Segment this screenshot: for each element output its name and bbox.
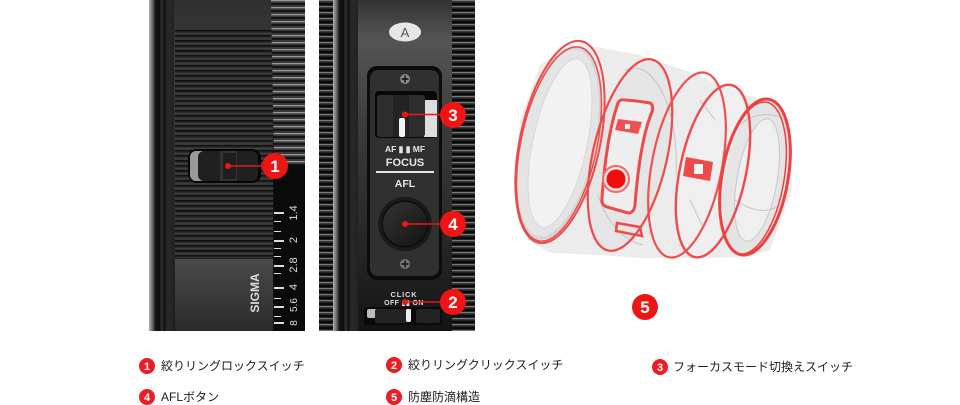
switch labels: AFL xyxy=(395,178,416,190)
internal parts detail xyxy=(598,68,785,245)
aperture scale numbers: 2.8 xyxy=(288,257,300,273)
pointer 3: 3 xyxy=(448,106,458,125)
switch labels xyxy=(376,144,434,190)
seal ring: fourth xyxy=(662,78,764,264)
pointer 4 xyxy=(402,211,466,237)
seal ring: third xyxy=(635,66,739,264)
seal ring: rear xyxy=(709,93,801,261)
marker 5 xyxy=(632,294,658,320)
aperture scale numbers: 1.4 xyxy=(288,205,300,221)
legend item 2: 絞りリングクリックスイッチ xyxy=(408,358,563,372)
legend item 4: AFLボタン xyxy=(161,390,219,404)
focus slider xyxy=(375,91,437,138)
aperture scale numbers: 5.6 xyxy=(289,298,300,312)
pointer 1 xyxy=(225,153,288,179)
aperture scale marks xyxy=(274,212,284,324)
legend item 4 xyxy=(139,389,219,405)
seal: ring opening xyxy=(683,157,713,181)
seal: AFL button xyxy=(603,166,629,192)
marker 5: 5 xyxy=(640,298,650,317)
SIGMA logo: SIGMA xyxy=(248,273,262,313)
AFL button xyxy=(378,197,432,251)
click switch: CLICK xyxy=(391,290,417,299)
legend item 5: 5 xyxy=(391,392,397,404)
legend item 3: 3 xyxy=(657,362,663,374)
seal: focus switch xyxy=(615,119,642,134)
click switch: OFF ▮▮ ON xyxy=(384,300,424,307)
lock switch xyxy=(188,149,261,183)
legend item 5: 防塵防滴構造 xyxy=(408,389,480,404)
bottom screw xyxy=(400,259,410,269)
pointer 2: 2 xyxy=(448,293,458,312)
seal: switch panel gasket xyxy=(602,100,653,213)
lens body silhouette xyxy=(515,43,792,258)
legend item 3: フォーカスモード切換えスイッチ xyxy=(673,360,853,374)
seal ring: front xyxy=(499,33,621,251)
aperture scale numbers: 4 xyxy=(288,284,300,290)
A mode badge xyxy=(389,22,421,42)
switch panel xyxy=(367,66,442,280)
switch labels: AF ▮ ▮ MF xyxy=(385,144,425,154)
seal ring: second xyxy=(572,51,688,259)
aperture scale numbers: 2 xyxy=(288,237,300,243)
seal: click switch xyxy=(616,223,642,236)
click switch xyxy=(364,290,442,325)
legend item 2: 2 xyxy=(391,360,397,372)
legend xyxy=(139,357,853,405)
pointer 1: 1 xyxy=(270,157,280,176)
legend item 5 xyxy=(386,389,480,405)
diagram: transparent lens with red seals xyxy=(499,33,801,264)
aperture scale numbers xyxy=(288,205,300,326)
pointer 4: 4 xyxy=(448,215,458,234)
photo: focus and AFL switch panel xyxy=(319,0,475,331)
aperture scale numbers: 8 xyxy=(289,320,300,326)
legend item 1: 絞りリングロックスイッチ xyxy=(161,359,305,373)
pointer 3 xyxy=(402,102,466,128)
A mode badge: A xyxy=(401,25,410,40)
switch labels: FOCUS xyxy=(386,157,424,169)
photo: aperture ring lock switch on lens barrel xyxy=(149,0,305,331)
legend item 4: 4 xyxy=(144,392,151,404)
top screw xyxy=(400,74,410,84)
legend item 1: 1 xyxy=(144,361,150,373)
pointer 2 xyxy=(402,289,466,315)
